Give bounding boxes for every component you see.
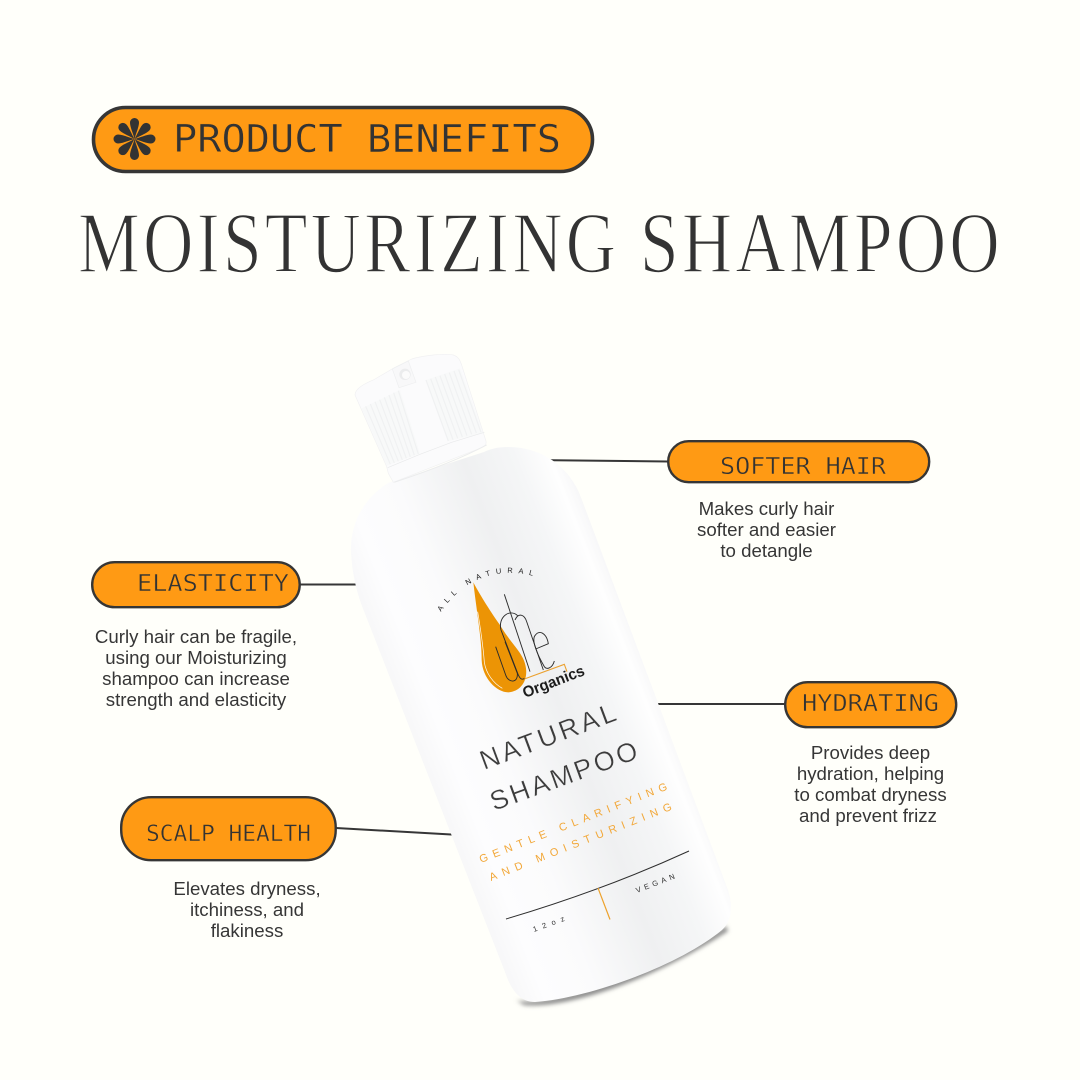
callout: softer hair: softer and easier: [697, 519, 836, 540]
curved label: all natural: ALL NATURAL: [438, 568, 532, 612]
callout: scalp health: itchiness, and: [190, 899, 304, 920]
callout: hydrating: Provides deep: [811, 742, 930, 763]
callout: softer hair: [668, 441, 929, 561]
connector: scalp health: [336, 828, 460, 835]
product name: natural: NATURAL: [476, 697, 620, 776]
callout: softer hair: Makes curly hair: [699, 498, 834, 519]
callout: elasticity: strength and elasticity: [106, 689, 287, 710]
callout: scalp health: [121, 797, 336, 941]
callout: hydrating: and prevent frizz: [799, 805, 937, 826]
logo mark: [473, 582, 567, 692]
tagline: gentle clarifying: GENTLE CLARIFYING: [478, 781, 669, 866]
label divider orange: [598, 888, 610, 920]
callout: scalp health: Elevates dryness,: [173, 878, 321, 899]
callout: hydrating: [785, 682, 956, 826]
icon: flower asterisk: [114, 118, 156, 160]
callout: elasticity: using our Moisturizing: [105, 647, 287, 668]
callout: scalp health: flakiness: [211, 920, 283, 941]
logo: script letters: [496, 594, 554, 681]
product name: shampoo: SHAMPOO: [486, 735, 642, 817]
label divider: [506, 851, 689, 919]
size: 12oz: 12oz: [532, 914, 566, 934]
callout: elasticity: shampoo can increase: [102, 668, 290, 689]
badge: product benefits: [94, 108, 592, 172]
callout: scalp health: SCALP HEALTH: [146, 822, 311, 847]
connector: elasticity: [300, 584, 365, 586]
callout: softer hair: to detangle: [720, 540, 813, 561]
vegan: VEGAN: [634, 872, 676, 895]
badge text: PRODUCT BENEFITS: [173, 117, 561, 162]
logo: orange underline: [524, 664, 567, 679]
callout: elasticity: [92, 562, 300, 710]
tagline: and moisturizing: AND MOISTURIZING: [488, 801, 674, 884]
product bottle: [354, 354, 730, 1008]
bottle body: [351, 447, 731, 1002]
bottle cap: [355, 354, 487, 482]
bottle shadow: [516, 926, 728, 1005]
connector: hydrating: [640, 703, 785, 705]
callout: elasticity: Curly hair can be fragile,: [95, 626, 297, 647]
logo: organics: Organics: [520, 663, 587, 702]
callout: hydrating: HYDRATING: [802, 691, 939, 717]
callout: hydrating: hydration, helping: [797, 763, 944, 784]
logo: orange drop: [473, 582, 526, 692]
title: MOISTURIZING SHAMPOO: [78, 196, 1000, 292]
callout: hydrating: to combat dryness: [794, 784, 947, 805]
callout: softer hair: SOFTER HAIR: [720, 454, 886, 480]
callout: elasticity: ELASTICITY: [137, 571, 289, 597]
connector: softer hair: [530, 460, 668, 462]
